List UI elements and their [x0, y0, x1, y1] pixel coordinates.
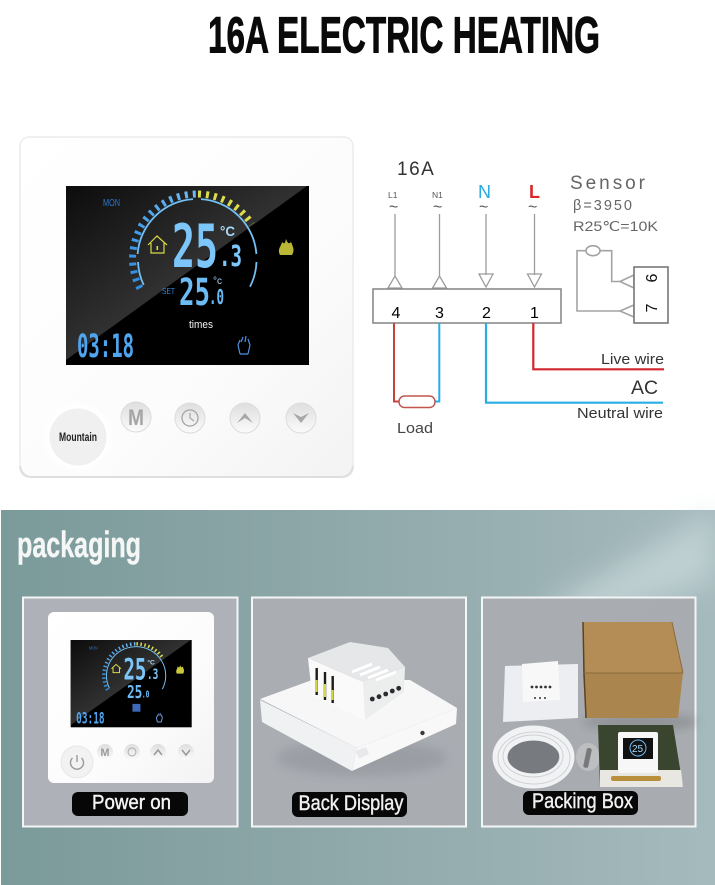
manual — [598, 725, 683, 787]
small power knob — [61, 746, 93, 778]
small button: down — [178, 744, 194, 760]
input labels: ~ — [479, 199, 488, 216]
small temperature decimal: .3 — [147, 667, 158, 683]
cardboard box — [582, 622, 698, 730]
mode text on screen: times — [189, 319, 213, 331]
small day label: MON — [89, 646, 98, 652]
set temperature decimal: .0 — [209, 285, 224, 309]
icon: house — [148, 236, 167, 253]
thermostat front panel — [20, 137, 353, 477]
small clock readout: 03:18 — [76, 709, 105, 727]
terminal block: 1 — [530, 305, 539, 322]
temperature gauge — [133, 194, 256, 288]
screw bag — [576, 743, 600, 771]
terminal block: 2 — [482, 305, 491, 322]
icon: flame — [279, 239, 294, 255]
input labels: ~ — [528, 199, 537, 216]
label: packing box: Packing Box — [532, 790, 633, 813]
button: clock — [175, 403, 205, 433]
live wire — [533, 323, 664, 369]
small button: M — [97, 744, 113, 760]
input labels: ~ — [433, 199, 442, 216]
usb port — [356, 747, 369, 759]
sensor specification: Sensor — [570, 173, 646, 194]
terminal block: 4 — [392, 305, 400, 322]
back of thermostat — [260, 642, 457, 776]
sensor specification: β=3950 — [573, 198, 632, 214]
load circuit — [394, 323, 439, 408]
card: packing box — [482, 598, 698, 826]
load label: Load — [397, 421, 433, 437]
sensor terminal 7: 7 — [644, 304, 661, 312]
card: back display — [252, 598, 466, 826]
input labels — [388, 182, 540, 216]
degree unit: °C — [220, 223, 235, 239]
set label: SET — [162, 287, 175, 296]
small button: up — [150, 744, 166, 760]
small degree unit: °C — [147, 658, 155, 666]
small button: M: M — [100, 747, 110, 759]
sensor cable coil — [498, 732, 570, 784]
LCD screen — [66, 186, 309, 365]
input labels: ~ — [389, 199, 398, 216]
knob label: Mountain — [59, 430, 97, 444]
side screw — [420, 731, 425, 735]
sensor specification — [570, 173, 659, 234]
small button: clock — [124, 744, 140, 760]
button: M: M — [128, 405, 144, 430]
sensor terminal 6: 6 — [644, 274, 661, 282]
input labels: L1 — [388, 190, 398, 200]
input leads and arrows — [388, 214, 542, 288]
label: back display: Back Display — [298, 792, 404, 815]
icon: hand — [238, 336, 250, 354]
card: power on — [23, 598, 238, 826]
side slots — [317, 668, 333, 703]
sensor circuit — [577, 246, 668, 323]
small house icon — [112, 664, 121, 673]
set temperature: 25 — [179, 271, 210, 314]
label: power on — [72, 792, 188, 816]
small temperature: 25 — [123, 653, 146, 686]
wiring diagram — [373, 159, 668, 437]
packaging section background — [1, 510, 715, 885]
button: M — [121, 402, 151, 432]
day label: MON — [103, 198, 120, 209]
AC label: AC — [631, 378, 658, 399]
neutral wire — [486, 323, 663, 403]
small set decimal: .0 — [142, 690, 149, 701]
thermostat rear panel — [503, 661, 578, 722]
terminal block: 3 — [435, 305, 444, 322]
current temperature: 25 — [172, 212, 218, 282]
small thermostat — [48, 612, 214, 783]
diagram heading 16A: 16A — [397, 159, 435, 180]
button: up — [230, 403, 260, 433]
power knob — [45, 404, 111, 470]
input labels: N — [478, 182, 491, 202]
section heading: packaging — [17, 524, 141, 565]
neutral wire label: Neutral wire — [577, 406, 663, 422]
label: power on: Power on — [92, 792, 171, 814]
set degree unit: °c — [213, 276, 222, 287]
live wire label: Live wire — [601, 352, 664, 368]
clock readout: 03:18 — [77, 327, 134, 365]
terminal block — [373, 289, 561, 323]
small set temperature: 25 — [127, 682, 142, 703]
current temperature decimal: .3 — [219, 239, 242, 273]
sensor specification: R25℃=10K — [573, 218, 659, 234]
input labels: N1 — [432, 190, 443, 200]
small flame icon — [176, 665, 184, 674]
input labels: L — [529, 182, 540, 202]
manual thumbnail temperature: 25 — [632, 744, 644, 755]
small hand icon — [156, 713, 162, 722]
yellow slot highlights — [317, 680, 333, 700]
small gauge — [104, 644, 166, 690]
button: down — [286, 403, 316, 433]
small mode marker — [132, 704, 140, 712]
terminal holes — [370, 686, 401, 701]
